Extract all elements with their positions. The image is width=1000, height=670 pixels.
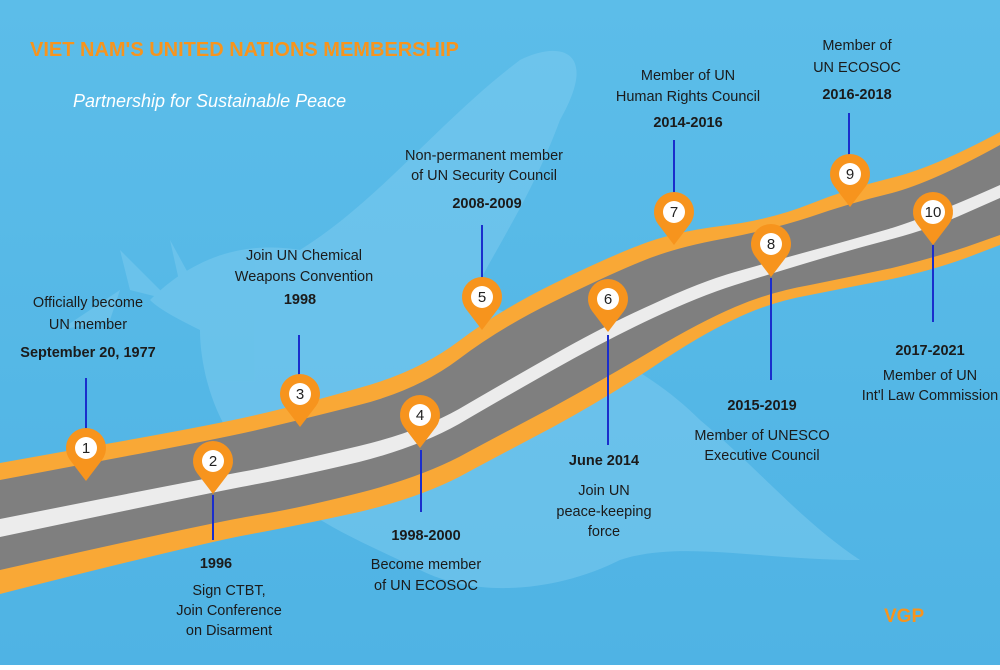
label 2: Join Conference bbox=[176, 603, 282, 619]
label 5: 2008-2009 bbox=[452, 196, 522, 212]
label 6: June 2014 bbox=[569, 453, 639, 469]
label 1: UN member bbox=[49, 317, 127, 333]
pins: 9 bbox=[846, 166, 854, 183]
road bbox=[0, 132, 1000, 594]
label 10: Member of UN bbox=[883, 368, 977, 384]
label 6: Join UN bbox=[578, 483, 630, 499]
connector lines bbox=[86, 113, 933, 540]
pins: 6 bbox=[604, 291, 612, 308]
label 9 bbox=[813, 38, 901, 103]
pins: 10 bbox=[925, 204, 941, 221]
subtitle: Partnership for Sustainable Peace bbox=[73, 91, 346, 111]
label 7: 2014-2016 bbox=[653, 115, 723, 131]
label 1: September 20, 1977 bbox=[20, 345, 156, 361]
pins: 2 bbox=[209, 453, 217, 470]
label 10: 2017-2021 bbox=[895, 343, 965, 359]
label 9: 2016-2018 bbox=[822, 87, 892, 103]
label 8: Executive Council bbox=[704, 448, 820, 464]
pins: 4 bbox=[416, 407, 424, 424]
label 5: of UN Security Council bbox=[411, 168, 557, 184]
label 6: force bbox=[588, 524, 620, 540]
label 1: Officially become bbox=[33, 295, 143, 311]
label 2: Sign CTBT, bbox=[192, 583, 266, 599]
label 8: Member of UNESCO bbox=[694, 428, 830, 444]
label 3: Join UN Chemical bbox=[246, 248, 362, 264]
label 9: UN ECOSOC bbox=[813, 60, 901, 76]
label 10: Int'l Law Commission bbox=[862, 388, 998, 404]
label 4: 1998-2000 bbox=[391, 528, 461, 544]
label 5 bbox=[405, 148, 563, 212]
pins: 8 bbox=[767, 236, 775, 253]
label 3: Weapons Convention bbox=[235, 269, 373, 285]
label 4: of UN ECOSOC bbox=[374, 578, 478, 594]
label 9: Member of bbox=[822, 38, 893, 54]
logo VGP: VGP bbox=[884, 606, 924, 627]
label 7: Member of UN bbox=[641, 68, 735, 84]
label 10 bbox=[862, 343, 998, 404]
label 3 bbox=[235, 248, 373, 308]
label 8: 2015-2019 bbox=[727, 398, 797, 414]
label 5: Non-permanent member bbox=[405, 148, 563, 164]
pins: 7 bbox=[670, 204, 678, 221]
label 8 bbox=[694, 398, 830, 464]
label 3: 1998 bbox=[284, 292, 316, 308]
label 6: peace-keeping bbox=[556, 504, 652, 520]
label 2 bbox=[176, 556, 282, 639]
pins: 3 bbox=[296, 386, 304, 403]
label 4 bbox=[371, 528, 481, 594]
label 4: Become member bbox=[371, 557, 481, 573]
label 6 bbox=[556, 453, 652, 540]
pins bbox=[66, 154, 953, 494]
title: VIET NAM'S UNITED NATIONS MEMBERSHIP bbox=[30, 39, 459, 61]
pins: 1 bbox=[82, 440, 90, 457]
dove silhouette bbox=[60, 51, 860, 588]
label 7: Human Rights Council bbox=[616, 89, 760, 105]
label 1 bbox=[20, 295, 156, 361]
label 2: on Disarment bbox=[186, 623, 272, 639]
label 7 bbox=[616, 68, 760, 131]
label 2: 1996 bbox=[200, 556, 232, 572]
pins: 5 bbox=[478, 289, 486, 306]
